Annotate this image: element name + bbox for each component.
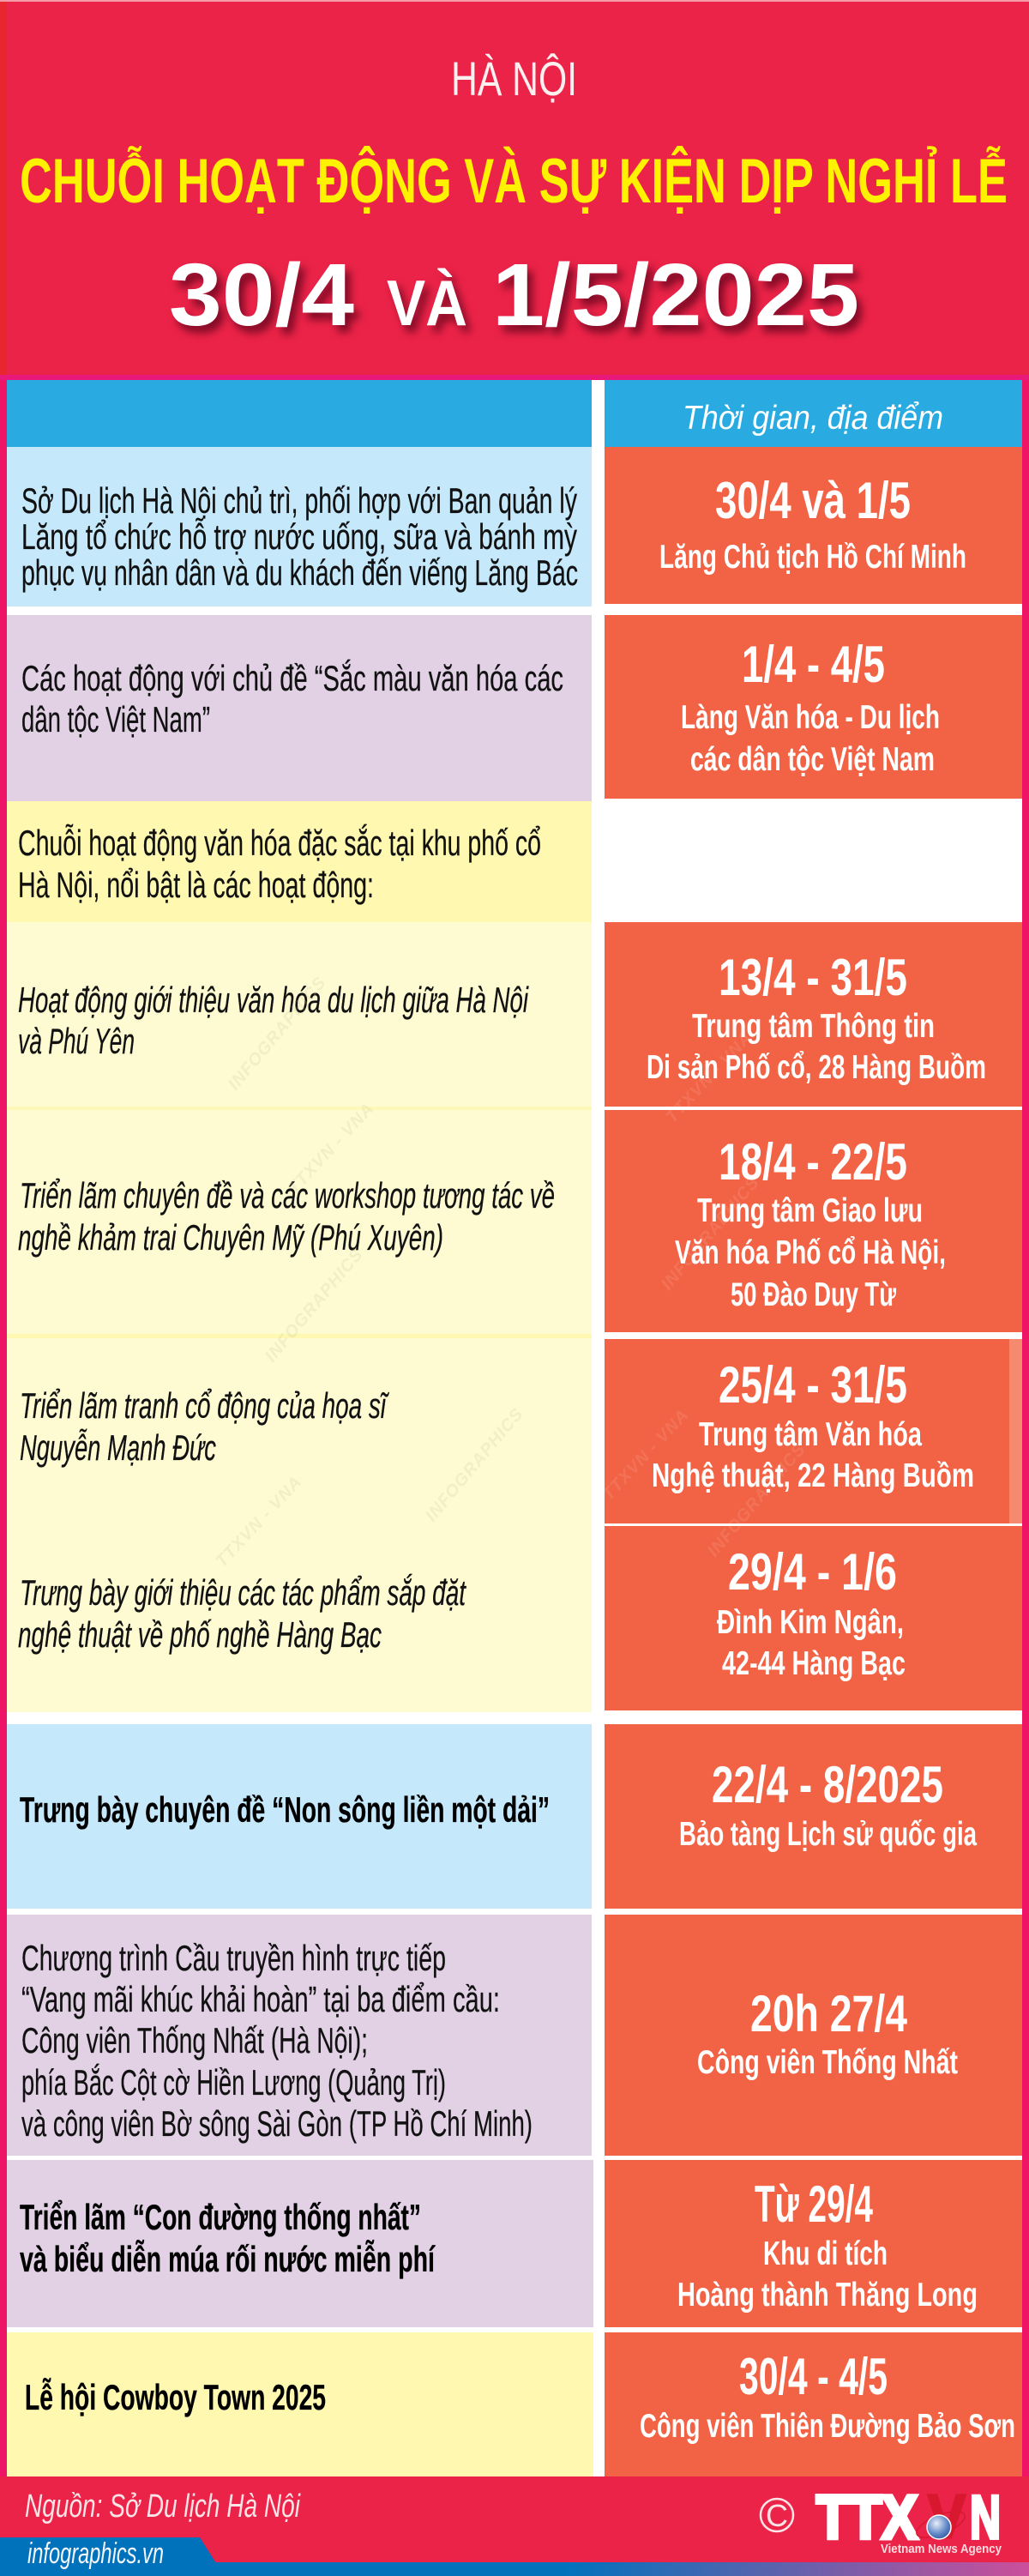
activity text: Triển lãm tranh cổ động của họa sĩ bbox=[20, 1385, 389, 1426]
row: television bridge bbox=[7, 1915, 1022, 2156]
time and place cell bbox=[605, 1526, 1022, 1710]
activity cell: Công viên Thống Nhất (Hà Nội); bbox=[21, 2020, 368, 2060]
date headline: 1/5/2025 bbox=[492, 245, 859, 344]
time and place cell bbox=[605, 1339, 1022, 1523]
footer bbox=[0, 2476, 1029, 2576]
logo: TTXVN: V bbox=[928, 2483, 966, 2551]
activity cell: Lăng tổ chức hỗ trợ nước uống, sữa và bánh mỳ bbox=[21, 516, 577, 557]
time and place cell: 13/4 - 31/5 bbox=[719, 949, 907, 1006]
activity cell: Các hoạt động với chủ đề “Sắc màu văn hóa các bbox=[21, 658, 563, 698]
activity text: Nguyễn Mạnh Đức bbox=[20, 1427, 216, 1468]
row: Cowboy Town festival bbox=[7, 2332, 1022, 2476]
text: INFOGRAPHICS bbox=[225, 973, 330, 1094]
activity text: Trưng bày giới thiệu các tác phẩm sắp đặt bbox=[20, 1572, 467, 1613]
source note: Nguồn: Sở Du lịch Hà Nội bbox=[25, 2489, 301, 2525]
text: TTXVN - VNA bbox=[213, 1473, 306, 1571]
time and place cell bbox=[605, 922, 1022, 1107]
activity cell: phục vụ nhân dân và du khách đến viếng Lăng Bác bbox=[21, 552, 578, 593]
table header bbox=[7, 380, 1022, 447]
row: Non sông liền một dải bbox=[7, 1724, 1022, 1909]
activity cell bbox=[7, 1724, 592, 1909]
time and place cell: 29/4 - 1/6 bbox=[728, 1543, 897, 1601]
activity cell bbox=[7, 2332, 593, 2476]
time and place cell: các dân tộc Việt Nam bbox=[690, 741, 935, 778]
row: unified road exhibition bbox=[7, 2160, 1022, 2327]
time and place cell: Đình Kim Ngân, bbox=[717, 1604, 904, 1641]
activity text: Hoạt động giới thiệu văn hóa du lịch giữa Hà Nội bbox=[18, 980, 529, 1020]
time and place cell bbox=[605, 1915, 1022, 2156]
text: INFOGRAPHICS bbox=[704, 1439, 809, 1560]
time and place cell: 18/4 - 22/5 bbox=[719, 1133, 907, 1191]
time and place cell bbox=[605, 1110, 1022, 1332]
activity cell bbox=[7, 447, 592, 606]
time and place cell: 50 Đào Duy Từ bbox=[731, 1276, 897, 1313]
date headline bbox=[169, 245, 859, 344]
activity text bbox=[20, 1385, 389, 1468]
website tab: infographics.vn bbox=[27, 2537, 164, 2570]
icon: copyright: C bbox=[766, 2498, 788, 2533]
icon: copyright bbox=[761, 2498, 793, 2533]
heading: location: HÀ NỘI bbox=[451, 51, 577, 106]
time and place cell: 22/4 - 8/2025 bbox=[712, 1756, 943, 1813]
row: Chuyên Mỹ workshop bbox=[18, 1110, 1022, 1332]
row: old quarter intro: Hà Nội, nổi bật là các hoạt động: bbox=[18, 865, 374, 905]
text: TTXVN - VNA bbox=[599, 1406, 693, 1504]
row: old quarter intro: Chuỗi hoạt động văn hóa đặc sắc tại khu phố cổ bbox=[18, 823, 541, 863]
time and place cell bbox=[605, 2160, 1022, 2327]
time and place cell: Trung tâm Văn hóa bbox=[699, 1416, 922, 1453]
activity cell: Sở Du lịch Hà Nội chủ trì, phối hợp với Ban quản lý bbox=[21, 480, 577, 521]
activity cell: phía Bắc Cột cờ Hiền Lương (Quảng Trị) bbox=[21, 2062, 446, 2102]
activity cell: dân tộc Việt Nam” bbox=[21, 699, 210, 739]
date headline: VÀ bbox=[387, 267, 467, 339]
time and place cell: Trung tâm Giao lưu bbox=[697, 1192, 923, 1229]
activity text: nghề khảm trai Chuyên Mỹ (Phú Xuyên) bbox=[18, 1217, 443, 1258]
activity cell bbox=[7, 1915, 592, 2156]
time and place cell bbox=[605, 615, 1022, 799]
activity text bbox=[18, 1572, 467, 1655]
row: ethnic culture bbox=[7, 615, 1022, 801]
header banner bbox=[0, 0, 1029, 380]
activity cell bbox=[7, 2160, 593, 2327]
activity cell: Lễ hội Cowboy Town 2025 bbox=[25, 2376, 326, 2417]
time and place cell bbox=[605, 2332, 1022, 2476]
text: TTXVN - VNA bbox=[285, 1100, 378, 1198]
logo: TTXVN bbox=[816, 2483, 1002, 2556]
time and place cell: 42-44 Hàng Bạc bbox=[722, 1645, 906, 1682]
text: INFOGRAPHICS bbox=[658, 1173, 763, 1294]
time and place cell: 25/4 - 31/5 bbox=[719, 1356, 907, 1414]
time and place cell bbox=[605, 1724, 1022, 1909]
text: INFOGRAPHICS bbox=[422, 1404, 527, 1525]
activity cell bbox=[7, 615, 592, 801]
row: poster exhibition bbox=[20, 1339, 1022, 1523]
time and place cell: 1/4 - 4/5 bbox=[742, 636, 885, 693]
activity text: nghệ thuật về phố nghề Hàng Bạc bbox=[18, 1614, 382, 1655]
date headline: 30/4 bbox=[169, 245, 354, 344]
time and place cell: Từ 29/4 bbox=[755, 2175, 873, 2233]
time and place cell: 30/4 - 4/5 bbox=[739, 2348, 888, 2405]
activity text bbox=[18, 980, 529, 1061]
activity cell: Chương trình Cầu truyền hình trực tiếp bbox=[21, 1938, 446, 1978]
logo: TTXVN: N bbox=[970, 2484, 1001, 2552]
activity cell: “Vang mãi khúc khải hoàn” tại ba điểm cầu: bbox=[21, 1979, 500, 2019]
activity text: Triển lãm chuyên đề và các workshop tương tác về bbox=[20, 1175, 555, 1216]
activity text: và Phú Yên bbox=[18, 1021, 135, 1061]
row: Lăng Bác support bbox=[7, 447, 1022, 606]
time and place cell: 30/4 và 1/5 bbox=[715, 472, 911, 529]
text: INFOGRAPHICS bbox=[262, 1245, 367, 1366]
activity cell: và biểu diễn múa rối nước miễn phí bbox=[20, 2238, 436, 2279]
logo: TTXVN: TTX bbox=[816, 2484, 918, 2552]
time and place cell: Khu di tích bbox=[763, 2235, 888, 2272]
logo: TTXVN: Vietnam News Agency bbox=[881, 2542, 1002, 2556]
time and place cell: 20h 27/4 bbox=[750, 1985, 907, 2042]
activity cell: và công viên Bờ sông Sài Gòn (TP Hồ Chí Minh) bbox=[21, 2103, 533, 2144]
row: Hàng Bạc display bbox=[18, 1526, 1022, 1710]
time and place cell: Trung tâm Thông tin bbox=[692, 1008, 935, 1045]
text: TTXVN - VNA bbox=[663, 1029, 756, 1126]
activity text bbox=[18, 1175, 555, 1258]
time and place cell bbox=[605, 447, 1022, 604]
column heading: time and place: Thời gian, địa điểm bbox=[683, 400, 943, 437]
gradient bottom bar bbox=[0, 2562, 1029, 2576]
row: Hà Nội - Phú Yên bbox=[18, 922, 1022, 1107]
row: old quarter intro bbox=[7, 801, 592, 922]
activity cell: Triển lãm “Con đường thống nhất” bbox=[20, 2197, 421, 2237]
activity cell: Trưng bày chuyên đề “Non sông liền một dải” bbox=[20, 1789, 550, 1830]
